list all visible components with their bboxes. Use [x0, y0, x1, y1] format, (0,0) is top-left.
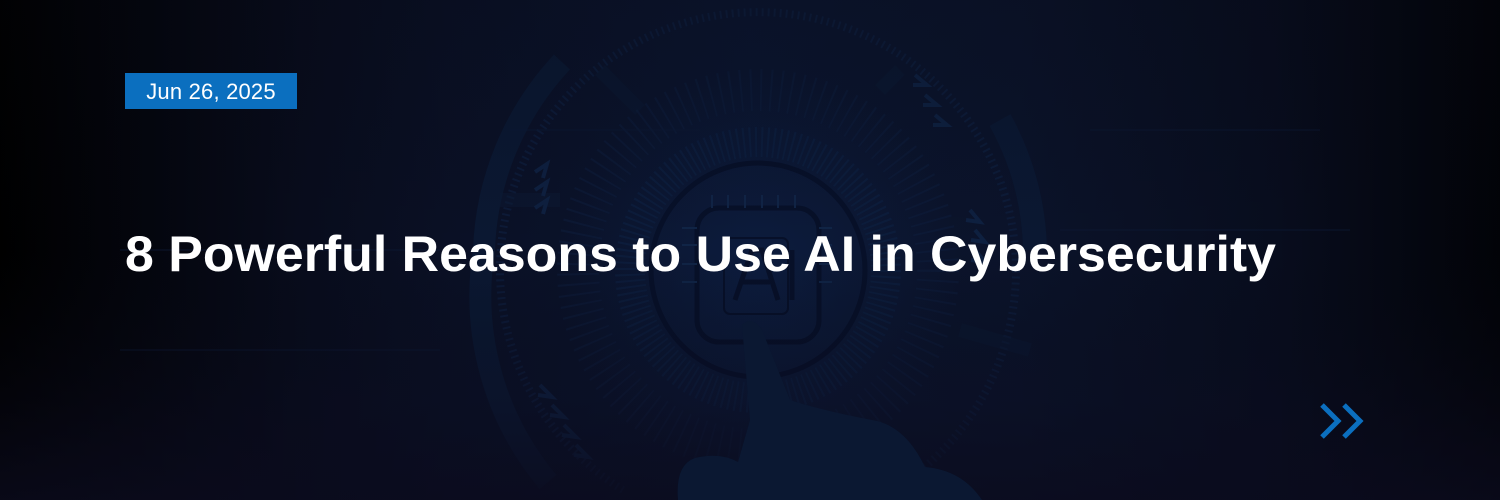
icon: double chevron arrow: [1320, 403, 1364, 439]
hand silhouette with pointing finger: [678, 321, 982, 500]
title: 8 Powerful Reasons to Use AI in Cybersecurity: [125, 226, 1276, 282]
date badge: [125, 73, 297, 109]
date badge: Jun 26, 2025: [146, 79, 276, 104]
